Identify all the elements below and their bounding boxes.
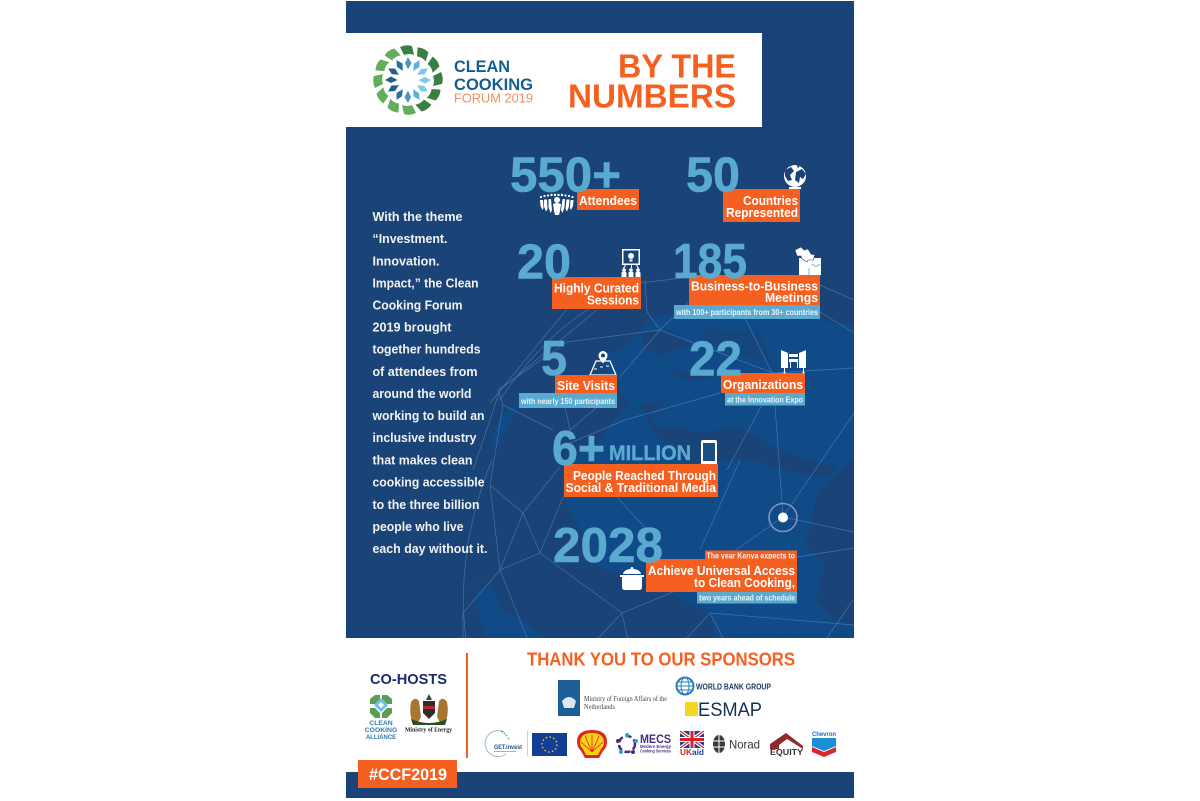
stat: 5 site visits: Site Visits bbox=[557, 379, 615, 393]
logo: MECS bbox=[616, 732, 671, 754]
title: NUMBERS bbox=[568, 78, 736, 116]
sponsor logos bbox=[485, 678, 836, 758]
icon: globe bbox=[784, 164, 806, 189]
stat: 22 organizations: at the Innovation Expo bbox=[727, 396, 803, 404]
stat: 6+ million: People Reached Through bbox=[573, 469, 716, 483]
intro paragraph: around the world bbox=[372, 386, 472, 401]
globe background map bbox=[463, 277, 854, 640]
intro paragraph: working to build an bbox=[372, 408, 485, 423]
stat: 50 countries bbox=[687, 156, 806, 222]
stat: 2028: Achieve Universal Access bbox=[648, 564, 795, 578]
stat: 50 countries: 50 bbox=[686, 148, 740, 202]
intro paragraph: With the theme bbox=[372, 209, 462, 224]
stat: 20 sessions: Sessions bbox=[587, 294, 639, 308]
co-hosts block: CO-HOSTS bbox=[370, 671, 447, 688]
logo: Equity: EQUITY bbox=[770, 747, 803, 757]
stat: 550+ attendees: 550+ bbox=[510, 148, 621, 202]
stat: 550+ attendees bbox=[510, 148, 639, 215]
stat: 185 meetings: with 100+ participants from 30+ countries bbox=[675, 308, 818, 317]
icon: crowd bbox=[540, 194, 574, 215]
logo: Norad: Norad bbox=[729, 738, 760, 752]
stat: 22 organizations bbox=[689, 332, 806, 406]
hashtag badge bbox=[358, 760, 457, 788]
stat: 185 meetings: Business-to-Business bbox=[691, 280, 818, 294]
logo: Equity bbox=[770, 733, 803, 757]
intro paragraph: 2019 brought bbox=[372, 320, 452, 334]
intro paragraph: Cooking Forum bbox=[372, 298, 462, 312]
logo: Norad bbox=[713, 735, 760, 753]
stat: 5 site visits: with nearly 150 participants bbox=[520, 397, 615, 406]
logo: MECS: Cooking Services bbox=[640, 748, 671, 754]
icon: cooking pot bbox=[620, 567, 644, 590]
intro paragraph: of attendees from bbox=[372, 364, 478, 379]
intro paragraph: people who live bbox=[372, 519, 464, 534]
stat: 22 organizations: Organizations bbox=[723, 378, 803, 392]
divider bbox=[466, 653, 468, 758]
stat: 20 sessions bbox=[517, 236, 641, 309]
intro paragraph: Innovation. bbox=[372, 254, 440, 268]
intro paragraph: that makes clean bbox=[372, 452, 473, 468]
logo: MECS: MECS bbox=[640, 732, 671, 746]
logo: GET.invest: GET.invest bbox=[494, 744, 523, 751]
intro paragraph: “Investment. bbox=[372, 231, 448, 246]
stat: 6+ million bbox=[552, 422, 718, 497]
stat: 5 site visits: 5 bbox=[541, 332, 567, 386]
intro paragraph: Impact,” the Clean bbox=[372, 276, 479, 290]
stat: 2028: to Clean Cooking, bbox=[694, 576, 795, 590]
logo wordmark: FORUM 2019 bbox=[454, 92, 533, 106]
intro paragraph: each day without it. bbox=[372, 541, 488, 556]
panel: blue background bbox=[346, 1, 854, 638]
co-hosts block bbox=[365, 671, 453, 741]
stat: 2028 bbox=[553, 519, 797, 604]
icon: expo booths bbox=[781, 350, 806, 374]
title: BY THE bbox=[618, 48, 736, 86]
logo: UK aid bbox=[680, 731, 704, 757]
intro paragraph: to the three billion bbox=[372, 497, 480, 512]
logo: Kenya Ministry of Energy: Ministry of Energy bbox=[405, 726, 453, 734]
logo: rosette bbox=[373, 45, 443, 115]
stat: 50 countries: Represented bbox=[726, 206, 798, 220]
logo: Netherlands ministry: Ministry of Foreign Affairs of the bbox=[584, 696, 667, 703]
logo: Netherlands ministry bbox=[558, 680, 667, 716]
logo: clean cooking alliance bbox=[365, 695, 397, 741]
title bbox=[568, 48, 736, 116]
logo: GET.invest bbox=[485, 731, 528, 757]
footer band bbox=[346, 772, 854, 798]
stat: 185 meetings bbox=[673, 235, 821, 319]
stat: 5 site visits bbox=[519, 332, 617, 408]
logo: clean cooking alliance: CLEAN bbox=[369, 720, 393, 727]
stat: 550+ attendees: Attendees bbox=[579, 194, 637, 208]
intro paragraph: inclusive industry bbox=[372, 430, 477, 445]
header band bbox=[346, 33, 762, 127]
logo: Shell bbox=[577, 730, 607, 758]
stat: 6+ million: Social & Traditional Media bbox=[566, 481, 717, 495]
stat: 6+ million: 6+ bbox=[552, 422, 605, 476]
stat: 20 sessions: Highly Curated bbox=[554, 282, 639, 296]
icon: phone bbox=[701, 440, 717, 465]
logo: UK aid: aid bbox=[692, 748, 704, 757]
stat: 185 meetings: 185 bbox=[673, 235, 747, 289]
logo wordmark bbox=[454, 57, 533, 106]
logo: clean cooking alliance: ALLIANCE bbox=[366, 735, 396, 741]
stat: 22 organizations: 22 bbox=[689, 332, 742, 386]
stat: 50 countries: Countries bbox=[743, 194, 798, 208]
logo: Netherlands ministry: Netherlands bbox=[584, 704, 615, 711]
icon: puzzle bbox=[795, 247, 821, 275]
sponsors heading: THANK YOU TO OUR SPONSORS bbox=[527, 650, 795, 670]
icon: map pin bbox=[590, 351, 616, 375]
stat: 20 sessions: 20 bbox=[517, 236, 571, 290]
stat: 6+ million: MILLION bbox=[609, 442, 691, 465]
logo wordmark: COOKING bbox=[454, 75, 533, 94]
stat: 2028: two years ahead of schedule bbox=[699, 594, 795, 602]
intro paragraph: together hundreds bbox=[372, 342, 480, 356]
hashtag badge: #CCF2019 bbox=[369, 765, 447, 784]
logo: MECS: Modern Energy bbox=[640, 744, 671, 749]
stat: 185 meetings: Meetings bbox=[765, 291, 818, 305]
logo: Chevron bbox=[812, 731, 836, 757]
logo: clean cooking alliance: COOKING bbox=[365, 727, 397, 734]
stat: 2028: 2028 bbox=[553, 519, 663, 573]
stat: 2028: The year Kenya expects to bbox=[706, 552, 795, 560]
logo: Chevron: Chevron bbox=[812, 731, 836, 738]
logo: World Bank Group bbox=[676, 678, 771, 694]
map marker bbox=[769, 504, 797, 532]
logo: European Union flag bbox=[532, 733, 567, 756]
intro paragraph: cooking accessible bbox=[372, 474, 484, 490]
logo wordmark: CLEAN bbox=[454, 57, 510, 76]
icon: presentation bbox=[622, 249, 640, 277]
logo: ESMAP: ESMAP bbox=[698, 700, 762, 721]
logo: World Bank Group: WORLD BANK GROUP bbox=[696, 682, 771, 692]
intro paragraph bbox=[372, 209, 488, 556]
logo: UK aid: UK bbox=[680, 748, 692, 757]
